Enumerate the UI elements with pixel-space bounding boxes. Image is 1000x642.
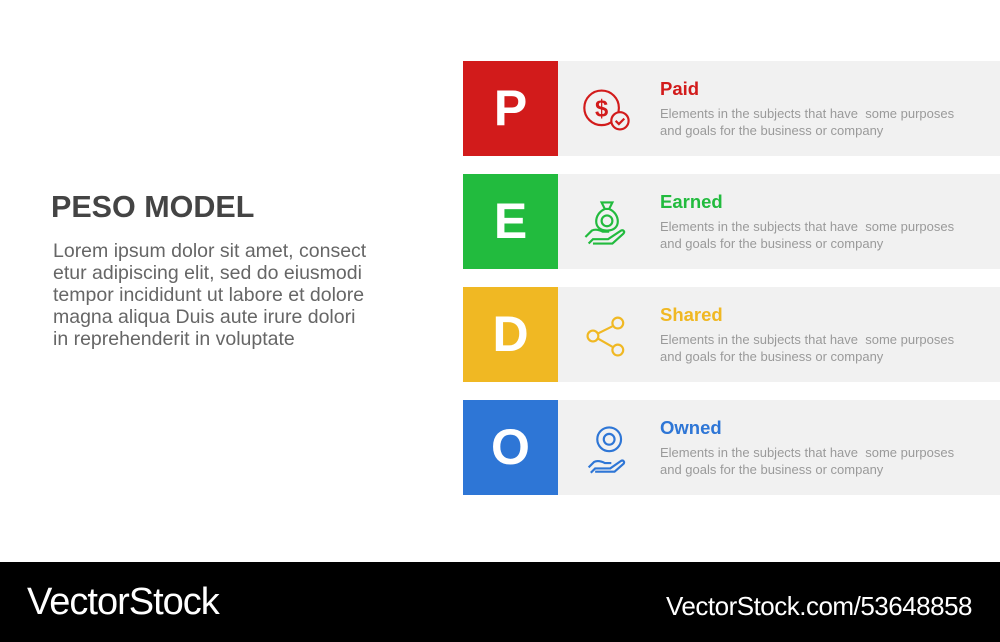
row: Earned: Elements in the subjects that have some purposes: [660, 219, 954, 234]
row: Shared: Elements in the subjects that have some purposes: [660, 332, 954, 347]
row: Paid: P: [494, 80, 527, 136]
row: Earned: Earned: [660, 191, 723, 212]
description text: Lorem ipsum dolor sit amet, consect: [53, 240, 366, 262]
icon: money bag hand: [584, 201, 626, 245]
row: Paid: [463, 61, 1000, 156]
row: Earned: E: [494, 193, 527, 249]
icon: dollar check: [583, 90, 630, 130]
row: Shared: [463, 287, 1000, 382]
description text: [53, 240, 366, 350]
icon: share: [586, 316, 624, 356]
description text: in reprehenderit in voluptate: [53, 328, 295, 350]
row: Shared: and goals for the business or company: [660, 349, 883, 364]
icon: dollar check: $: [595, 95, 608, 122]
footer bar: [0, 562, 1000, 642]
row: Owned: O: [491, 419, 530, 475]
row: Earned: and goals for the business or company: [660, 236, 883, 251]
row: Shared: Shared: [660, 304, 723, 325]
title: PESO MODEL: [51, 190, 254, 224]
row: Owned: [463, 400, 1000, 495]
row: Owned: Elements in the subjects that have some purposes: [660, 445, 954, 460]
row: Paid: Elements in the subjects that have some purposes: [660, 106, 954, 121]
description text: tempor incididunt ut labore et dolore: [53, 284, 364, 306]
row: Paid: and goals for the business or company: [660, 123, 883, 138]
footer bar: VectorStock: [27, 581, 219, 623]
description text: magna aliqua Duis aute irure dolori: [53, 306, 355, 328]
icon: gear hand: [588, 426, 626, 474]
row: Shared: D: [492, 306, 529, 362]
footer bar: VectorStock.com/53648858: [666, 591, 972, 621]
row: Paid: Paid: [660, 78, 699, 99]
description text: etur adipiscing elit, sed do eiusmodi: [53, 262, 362, 284]
row: Earned: [463, 174, 1000, 269]
row: Owned: and goals for the business or company: [660, 462, 883, 477]
row: Owned: Owned: [660, 417, 722, 438]
